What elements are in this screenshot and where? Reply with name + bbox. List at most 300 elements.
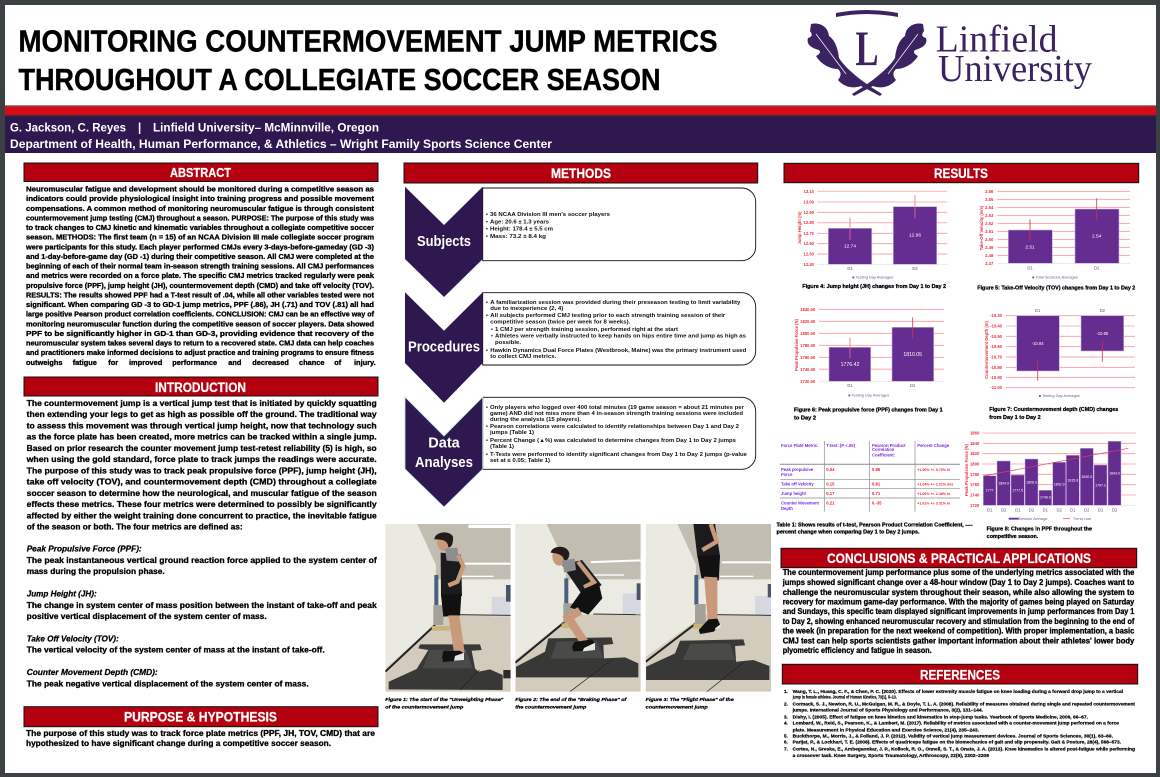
heading: results bbox=[784, 163, 1139, 183]
abstract text: indicators could provide physiological insight into training progress and possible movement bbox=[26, 194, 375, 203]
chart: PPF throughout season: 1760 bbox=[970, 482, 980, 487]
procedures box: All subjects performed CMJ testing prior to each strength training session of their bbox=[490, 313, 725, 319]
reference list: plate. Measurement in Physical Education and Exercise Science, 21(4), 235–243. bbox=[793, 727, 979, 732]
introduction text: to assess this movement was through vertical jump height, now that technology such bbox=[27, 420, 377, 430]
chart: PPF throughout season: 1840 bbox=[970, 441, 980, 446]
heading: conclusions: CONCLUSIONS & PRACTICAL APPLICATIONS bbox=[827, 551, 1091, 566]
abstract text: injury. bbox=[354, 358, 376, 367]
introduction text: as the force plate has been created, more metrics can be tracked within a single jump. bbox=[27, 432, 377, 442]
chart: take-off velocity: 2.55 bbox=[985, 197, 994, 202]
chart: countermovement depth: D2 bbox=[1100, 308, 1106, 313]
data analyses box: Percent Change (▲%) was calculated to determine changes from Day 1 to Day 2 jumps bbox=[490, 438, 736, 444]
panel: results bbox=[776, 163, 1139, 540]
chart: take-off velocity: 2.51 bbox=[1025, 244, 1035, 250]
table 1: force plate metrics: Depth bbox=[781, 506, 793, 511]
subjects chevron: Subjects bbox=[417, 234, 471, 250]
abstract text: beginning of each of their normal team in-season strength training sessions. All CMJ performances bbox=[26, 262, 374, 270]
conclusions text: the week (in preparation for the next weekend of competition). With proper implementation, a basic bbox=[783, 626, 1135, 636]
panel: introduction bbox=[24, 377, 378, 688]
data analyses box: • bbox=[486, 438, 488, 444]
chart: countermovement depth: -10.60 bbox=[990, 344, 1003, 349]
abstract text: outweighs bbox=[26, 358, 63, 367]
authors and affiliation: G. Jackson, C. Reyes bbox=[10, 122, 126, 134]
chart: take-off velocity: 2.50 bbox=[985, 237, 994, 242]
table 1: force plate metrics: Peak propulsive bbox=[781, 467, 814, 472]
abstract text: of bbox=[334, 358, 342, 367]
chart: take-off velocity: 2.48 bbox=[985, 253, 994, 258]
chart: PPF throughout season: 1830.5 bbox=[1081, 475, 1092, 479]
chart: PPF throughout season: Trend Line bbox=[1073, 516, 1091, 521]
introduction text: The purpose of this study was to track peak propulsive force (PPF), jump height (JH), bbox=[27, 465, 377, 475]
chart: countermovement depth: -10.84 bbox=[1032, 341, 1044, 346]
data analyses box: during the analysis (15 players). bbox=[490, 417, 582, 423]
chart: PPF throughout season: 1797.2 bbox=[1095, 484, 1106, 488]
panel: conclusions and practical applications bbox=[781, 548, 1137, 655]
reference list: 2. bbox=[784, 701, 788, 706]
photo captions: Figure 1: The start of the "Unweighting Phase" bbox=[385, 697, 504, 703]
chart: PPF throughout season: 1748.9 bbox=[1040, 496, 1051, 500]
chart: peak propulsive force bbox=[794, 307, 944, 397]
chart: jump height: 13.10 bbox=[804, 189, 815, 194]
procedures box: • bbox=[486, 300, 488, 306]
chart: PPF throughout season bbox=[964, 430, 1136, 521]
data analyses box: • bbox=[486, 452, 488, 458]
heading: references: REFERENCES bbox=[920, 667, 1000, 682]
chart: jump height: 12.40 bbox=[804, 262, 815, 267]
photo captions: Figure 3: The "Flight Phase" of the bbox=[646, 697, 734, 703]
table 1: force plate metrics: 0.71 bbox=[872, 491, 881, 496]
procedures chevron: Procedures bbox=[408, 340, 480, 356]
abstract text: RESULTS: The results showed PPF had a T-test result of .04, while all other variables tested were not bbox=[26, 290, 375, 299]
table 1: force plate metrics: 0.-35 bbox=[872, 500, 882, 506]
procedures box: • bbox=[491, 334, 493, 340]
reference list: jumps. International Journal of Sports Physiology and Performance, 3(2), 131–144. bbox=[792, 707, 983, 712]
chart: PPF throughout season: D2 bbox=[1112, 508, 1118, 512]
caption: figure 7: Figure 7: Countermovement depth (CMD) changes bbox=[989, 407, 1118, 413]
chart: countermovement depth: -10.50 bbox=[990, 334, 1003, 339]
heading: purpose and hypothesis: PURPOSE & HYPOTHESIS bbox=[124, 710, 277, 725]
reference list: 1. bbox=[784, 689, 788, 694]
logo: Linfield University: L bbox=[856, 20, 878, 76]
chart: countermovement depth: -10.90 bbox=[990, 375, 1003, 380]
heading: results: RESULTS bbox=[934, 166, 988, 181]
chart: countermovement depth: -10.65 bbox=[1096, 331, 1109, 336]
chart: PPF throughout season: Session Average bbox=[1018, 516, 1048, 521]
table 1: force plate metrics: Force bbox=[781, 472, 793, 477]
abstract text bbox=[25, 184, 376, 367]
abstract text: improved bbox=[129, 358, 163, 367]
subjects box: Height: 178.4 ± 5.5 cm bbox=[490, 226, 553, 232]
chart: jump height: ■ Testing Day Averages bbox=[852, 275, 893, 280]
heading: conclusions bbox=[781, 548, 1137, 568]
heading: abstract bbox=[24, 163, 378, 182]
reference list: Cortes, N., Greska, E., Ambegaonkar, J. P., Kollock, R. O., Onnell, S. T., & Onate, J. A. (2013). Knee kinematics is altered post-fatigue while performing bbox=[793, 747, 1135, 752]
chart: countermovement depth: D1 bbox=[1035, 308, 1041, 313]
header band bbox=[5, 10, 1156, 153]
chart: PPF throughout season: 1820 bbox=[970, 451, 980, 456]
procedures box: • bbox=[491, 327, 493, 333]
abstract text: neuromuscular system takes several days to return to a recovered state. CMJ data can help coaches bbox=[26, 339, 374, 348]
caption: figure 8 bbox=[987, 526, 1092, 540]
abstract text: and metrics were recorded on a force plate. The specific CMJ metrics tracked regularly were peak bbox=[26, 271, 375, 280]
title: THROUGHOUT A COLLEGIATE SOCCER SEASON bbox=[18, 62, 660, 97]
table 1: force plate metrics: Pearson Product bbox=[872, 443, 906, 448]
chart: PPF throughout season: 1780 bbox=[970, 472, 980, 477]
chart: peak propulsive force: 1840.00 bbox=[800, 307, 816, 312]
chart: jump height: 12.60 bbox=[804, 241, 815, 246]
reference list bbox=[784, 689, 1135, 758]
heading: introduction bbox=[24, 377, 378, 396]
table 1: force plate metrics: 0.15 bbox=[826, 482, 835, 486]
photo captions: the countermovement jump bbox=[515, 704, 586, 710]
chart: countermovement depth: -11.00 bbox=[990, 385, 1003, 390]
abstract text: to track changes to CMJ kinetic and kinematic variables throughout a collegiate competitive soccer bbox=[26, 223, 374, 232]
heading: references bbox=[782, 664, 1138, 684]
abstract text: season. METHODS: The first team (n = 15) of an NCAA Division III male collegiate soccer program bbox=[26, 233, 374, 242]
procedures box: • bbox=[486, 313, 488, 319]
authors and affiliation: Department of Health, Human Performance, & Athletics – Wright Family Sports Science Center bbox=[10, 139, 553, 151]
caption: figure 6: to Day 2 bbox=[794, 415, 816, 421]
procedures box bbox=[483, 293, 756, 365]
panel: references bbox=[782, 664, 1138, 758]
chart: take-off velocity: ■ Total Sessions Averages bbox=[1032, 275, 1078, 280]
table 1: force plate metrics: 0.21 bbox=[826, 500, 835, 506]
photo: figure 2 braking phase bbox=[515, 524, 641, 692]
abstract text: and bbox=[228, 358, 242, 367]
caption: table 1: Table 1: Shows results of t-test, Pearson Product Correlation Coefficient, ---- bbox=[776, 522, 973, 528]
abstract text: significant. When comparing GD -3 to GD-1 jump metrics, PPF (.86), JH (.71) and TOV (.81) all had bbox=[26, 300, 374, 309]
chart: take-off velocity: D1 bbox=[1027, 266, 1033, 270]
table 1: force plate metrics bbox=[780, 441, 960, 512]
chart: jump height: Jump Height (m) bbox=[797, 211, 802, 245]
chart: PPF throughout season: 1800 bbox=[970, 462, 980, 466]
photo captions: of the countermovement jump bbox=[385, 704, 463, 710]
abstract text: were participants for this study. Each player performed CMJs every 3-days-before-gameday (GD -3) bbox=[25, 242, 375, 251]
conclusions text: and Sundays, this specific team displayed significant improvements in jump performances from Day 1 bbox=[783, 607, 1135, 616]
procedures box: • bbox=[486, 348, 488, 354]
abstract text: and 1-day-before-game day (GD -1) during their competitive season. All CMJ were completed at the bbox=[26, 252, 374, 261]
chart: take-off velocity: 2.53 bbox=[985, 213, 994, 218]
chart: PPF throughout season: D2 bbox=[1084, 508, 1090, 512]
chart: peak propulsive force: 1760.00 bbox=[800, 355, 816, 360]
chart: countermovement depth: -10.70 bbox=[990, 354, 1003, 360]
abstract text: for bbox=[108, 358, 118, 367]
metric definitions: The change in system center of mass position between the instant of take-off and peak bbox=[27, 600, 377, 610]
title bbox=[18, 24, 718, 97]
reference list: 5. bbox=[784, 733, 788, 738]
abstract text: chance bbox=[299, 358, 324, 367]
data analyses box: jumps (Table 1) bbox=[489, 430, 534, 436]
chart: PPF throughout season: D2 bbox=[1029, 508, 1035, 512]
metric definitions: The peak instantaneous vertical ground reaction force applied to the system center of bbox=[27, 555, 377, 565]
subjects box: Mass: 73.2 ± 8.4 kg bbox=[490, 234, 546, 240]
panel: methods bbox=[404, 163, 758, 507]
conclusions text: CMJ test can help sports scientists gather important information about their athletes' lower body bbox=[783, 636, 1135, 646]
procedures chevron bbox=[405, 292, 483, 403]
chart: PPF throughout season: 1804.9 bbox=[998, 481, 1009, 485]
subjects box: • bbox=[486, 220, 488, 226]
chart: peak propulsive force: D2 bbox=[910, 383, 916, 388]
chart: take-off velocity: 2.52 bbox=[985, 221, 994, 226]
procedures box: A familiarization session was provided during their preseason testing to limit variability bbox=[490, 300, 740, 306]
chart: jump height bbox=[797, 189, 947, 280]
abstract text: and practitioners make informed decisions to adjust practice and training programs to ensure fitness bbox=[26, 348, 374, 357]
metric definitions: Peak Propulsive Force (PPF): bbox=[27, 544, 142, 554]
procedures box: competitive season (twice per week for 8 weeks). bbox=[490, 320, 631, 326]
conclusions text: challenge the neuromuscular system throughout their season, while also allowing the system to bbox=[783, 588, 1135, 597]
chart: countermovement depth bbox=[984, 308, 1135, 398]
caption: figure 6 bbox=[794, 407, 943, 421]
data analyses box: • bbox=[486, 424, 488, 430]
table 1: force plate metrics: Coefficient: bbox=[872, 452, 895, 458]
logo: Linfield University: University bbox=[938, 48, 1092, 90]
chart: take-off velocity: Take-Off Velocity (m/s) bbox=[979, 205, 984, 250]
procedures box: to collect CMJ metrics. bbox=[490, 354, 557, 360]
subjects chevron bbox=[405, 187, 483, 297]
chart: jump height: 12.80 bbox=[804, 220, 815, 225]
procedures box: due to inexperience (2, 4) bbox=[490, 306, 564, 312]
chart: PPF throughout season: 1808.3 bbox=[1026, 480, 1037, 484]
introduction text: soccer season to determine how the neurological, and muscular fatigue of the season bbox=[27, 488, 377, 498]
chart: peak propulsive force: 1780.00 bbox=[800, 343, 816, 348]
data analyses chevron: Analyses bbox=[415, 455, 473, 471]
reference list: Buckthorpe, M., Morris, J., & Folland, J. P. (2012). Validity of vertical jump measurement devices. Journal of Sports Sciences, 30(1), 63–69. bbox=[793, 733, 1113, 738]
data analyses box: game) AND did not miss more than 4 in-season strength training sessions were included bbox=[490, 411, 743, 417]
conclusions text: to Day 2, showing enhanced neuromuscular recovery and stimulation from the beginning to the end of bbox=[783, 617, 1135, 626]
table 1: force plate metrics: 0.81 bbox=[872, 482, 881, 486]
table 1: force plate metrics: 0.86 bbox=[872, 467, 881, 472]
chart: PPF throughout season: D1 bbox=[1043, 508, 1049, 512]
logo: Linfield University: Linfield bbox=[936, 19, 1058, 61]
reference list: jump in female athletes. Journal of Human Kinetics, 73(1), 5–13. bbox=[792, 695, 897, 700]
chart: countermovement depth: Countermovement Depth (m) bbox=[984, 321, 989, 379]
caption: table 1: percent change when comparing Day 1 to Day 2 jumps. bbox=[776, 530, 920, 536]
chart: take-off velocity: 2.54 bbox=[985, 205, 994, 210]
authors and affiliation bbox=[10, 122, 553, 151]
abstract text: large positive Pearson product correlation coefficients. CONCLUSION: CMJ can be an effective way of bbox=[26, 310, 375, 319]
heading: methods: METHODS bbox=[551, 166, 611, 181]
metric definitions: mass during the propulsion phase. bbox=[27, 566, 165, 576]
reference list: Parijat, P., & Lockhart, T. E. (2008). Effects of quadriceps fatigue on the biomechanics of gait and slip propensity. Gait & Posture, 28(4), 568–573. bbox=[793, 739, 1121, 744]
authors and affiliation: Linfield University– McMinnville, Oregon bbox=[153, 122, 379, 134]
metric definitions: The vertical velocity of the system center of mass at the instant of take-off. bbox=[27, 644, 325, 654]
chart: countermovement depth: -10.80 bbox=[990, 365, 1003, 370]
chart: peak propulsive force: 1810.05 bbox=[903, 352, 922, 358]
photo captions: Figure 2: The end of the "Braking Phase" of bbox=[515, 697, 628, 703]
subjects box: 36 NCAA Division III men's soccer players bbox=[490, 212, 610, 218]
chart: PPF throughout season: 1843.0 bbox=[1109, 472, 1120, 476]
data analyses box: (Table 1) bbox=[490, 444, 514, 450]
caption: figure 5: Figure 5: Take-Off Velocity (TOV) changes from Day 1 to Day 2 bbox=[977, 285, 1135, 291]
conclusions text: plyometric efficiency and fatigue in season. bbox=[783, 646, 932, 655]
metric definitions: Take Off Velocity (TOV): bbox=[27, 634, 119, 644]
conclusions text bbox=[782, 568, 1135, 655]
chart: PPF throughout season: 1720 bbox=[970, 503, 980, 508]
procedures box: 1 CMJ per strength training session, performed right at the start bbox=[495, 327, 678, 333]
panel: purpose and hypothesis bbox=[24, 707, 378, 748]
caption: figure 8: competitive season. bbox=[987, 534, 1039, 540]
caption: figure 7 bbox=[989, 407, 1118, 421]
data analyses box: • bbox=[486, 405, 488, 411]
chart: PPF throughout season: 1860 bbox=[970, 430, 980, 436]
abstract text: monitoring neuromuscular function during the competitive season of soccer players. Data showed bbox=[26, 319, 374, 328]
reference list: Lombard, W., Reid, S., Pearson, K., & Lambert, M. (2017). Reliability of metrics associated with a counter-movement jump performed on a force bbox=[793, 720, 1119, 725]
subjects box: • bbox=[486, 226, 488, 232]
subjects box: Age: 20.6 ± 1.3 years bbox=[490, 220, 549, 226]
chart: jump height: 13.00 bbox=[804, 200, 815, 204]
reference list: 3. bbox=[784, 714, 788, 719]
introduction text: take off velocity (TOV), and countermovement depth (CMD) throughout a collegiate bbox=[27, 477, 377, 487]
data analyses chevron bbox=[405, 397, 483, 507]
introduction text: Based on prior research the counter movement jump test-retest reliability (5) is high, so bbox=[27, 443, 377, 453]
photo captions: countermovement jump bbox=[646, 704, 708, 710]
metric definitions: The peak negative vertical displacement of the system center of mass. bbox=[27, 678, 309, 688]
table 1: force plate metrics: Counter Movement bbox=[781, 500, 820, 506]
chart: countermovement depth: -10.30 bbox=[990, 313, 1003, 318]
chart: peak propulsive force: 1820.00 bbox=[800, 319, 816, 324]
data analyses box: Only players who logged over 400 total minutes (19 game season = about 21 minutes per bbox=[490, 405, 744, 411]
chart: jump height: 12.50 bbox=[804, 252, 815, 256]
chart: PPF throughout season: 1740 bbox=[970, 492, 980, 498]
chart: PPF throughout season: 1802.9 bbox=[1054, 482, 1065, 486]
conclusions text: recovery for maximum game-day performance. With the majority of games being played on Saturday bbox=[783, 598, 1135, 606]
metric definitions: positive vertical displacement of the system center of mass. bbox=[27, 611, 267, 621]
chart: peak propulsive force: 1740.00 bbox=[800, 367, 816, 372]
chart: take-off velocity: 2.56 bbox=[985, 189, 994, 194]
authors and affiliation: | bbox=[138, 122, 141, 134]
metric definitions: Jump Height (JH): bbox=[27, 588, 97, 598]
chart: PPF throughout season: D1 bbox=[1015, 508, 1021, 512]
data analyses box: set at ≤ 0.05; Table 1) bbox=[490, 458, 550, 464]
caption: figure 8: Figure 8: Changes in PPF throughout the bbox=[987, 526, 1092, 532]
data analyses chevron: Data bbox=[428, 436, 461, 452]
chart: PPF throughout season: 1815.8 bbox=[1067, 478, 1078, 482]
heading: abstract: ABSTRACT bbox=[170, 165, 231, 180]
procedures box: possible. bbox=[495, 340, 522, 346]
reference list: 7. bbox=[784, 747, 788, 752]
abstract text: decreased bbox=[252, 358, 289, 367]
table 1: force plate metrics: T-test: (P <.05) bbox=[826, 443, 856, 448]
heading: introduction: INTRODUCTION bbox=[155, 380, 246, 395]
chart: PPF throughout season: D1 bbox=[1098, 508, 1104, 512]
introduction text: then extending your legs to get as high as possible off the ground. The traditional way bbox=[27, 409, 377, 419]
abstract text: Neuromuscular fatigue and development should be monitored during a competitive season as bbox=[26, 184, 374, 194]
panel: abstract bbox=[24, 163, 378, 367]
abstract text: countermovement jump testing (CMJ) throughout a season. PURPOSE: The purpose of this study was bbox=[26, 213, 374, 222]
purpose text: hypothesized to have significant change during a competitive soccer season. bbox=[26, 739, 331, 748]
caption: figure 6: Figure 6: Peak propulsive force (PPF) changes from Day 1 bbox=[794, 407, 943, 413]
data analyses box: Pearson correlations were calculated to identify relationships between Day 1 and Day 2 bbox=[490, 424, 739, 430]
caption: figure 4: Figure 4: Jump height (JH) changes from Day 1 to Day 2 bbox=[802, 284, 946, 290]
heading: purpose and hypothesis bbox=[24, 707, 378, 727]
table 1: force plate metrics: Percent Change bbox=[917, 443, 950, 448]
chart: PPF throughout season: 1777.5 bbox=[1012, 489, 1023, 493]
reference list: 6. bbox=[784, 739, 788, 744]
purpose text: The purpose of this study was to track force plate metrics (PPF, JH, TOV, CMD) that are bbox=[26, 729, 376, 738]
reference list: 4. bbox=[784, 720, 788, 725]
table 1: force plate metrics: Jump height bbox=[781, 491, 806, 496]
chart: peak propulsive force: ■ Testing Day Averages bbox=[848, 392, 889, 397]
introduction text bbox=[26, 398, 377, 532]
chart: PPF throughout season: D1 bbox=[987, 508, 993, 512]
conclusions text: The countermovement jump performance plus some of the underlying metrics associated with the bbox=[783, 568, 1135, 577]
table 1: force plate metrics: 0.04 bbox=[826, 467, 835, 472]
data analyses box: T-Tests were performed to identify significant changes from Day 1 to Day 2 jumps (p-value bbox=[490, 452, 747, 458]
subjects box: • bbox=[486, 212, 488, 218]
logo: Linfield University bbox=[808, 10, 1092, 96]
photo: figure 3 flight phase bbox=[646, 524, 772, 692]
table 1: force plate metrics: Take off Velocity bbox=[781, 482, 814, 486]
title: MONITORING COUNTERMOVEMENT JUMP METRICS bbox=[18, 24, 718, 59]
introduction text: affected by either the weight training done concurrent to practice, the inevitable fatigue bbox=[27, 510, 377, 520]
abstract text: propulsive force (PPF), jump height (JH), countermovement depth (CMD) and take off velocity (TOV). bbox=[26, 281, 374, 290]
introduction text: of the season or both. The four metrics are defined as: bbox=[27, 522, 243, 532]
chart: take-off velocity: 2.47 bbox=[985, 261, 994, 266]
heading: methods bbox=[404, 163, 758, 183]
chart: take-off velocity: 2.49 bbox=[985, 245, 994, 250]
photo captions bbox=[385, 697, 734, 710]
table 1: force plate metrics: +1.06% +/- 2.38% in bbox=[917, 492, 950, 496]
chart: countermovement depth: ■ Testing Day Averages bbox=[1039, 393, 1080, 398]
introduction text: The countermovement jump is a vertical jump test that is initiated by quickly squatting bbox=[27, 398, 377, 408]
table 1: force plate metrics: Correlation bbox=[872, 447, 895, 452]
table 1: force plate metrics: +1.61% +/- 3.31% in bbox=[917, 502, 950, 506]
metric definitions: Counter Movement Depth (CMD): bbox=[27, 667, 158, 677]
chart: peak propulsive force: D1 bbox=[847, 383, 853, 388]
chart: jump height: D1 bbox=[847, 266, 853, 271]
chart: jump height: 12.90 bbox=[804, 210, 815, 215]
abstract text: PPF to be significantly higher in GD-1 than GD-3, providing evidence that recovery of the bbox=[26, 329, 374, 338]
chart: peak propulsive force: 1800.00 bbox=[800, 331, 816, 336]
abstract text: compensations. A common method of monitoring neuromuscular fatigue is through consistent bbox=[26, 204, 375, 213]
chart: take-off velocity bbox=[979, 189, 1130, 280]
reference list: Wang, T. L., Huang, C. F., & Chen, P. C. (2020). Effects of lower extremity muscle fatigue on knee loading during a forward drop jump to a vertical bbox=[793, 689, 1123, 694]
chart: PPF throughout season: D2 bbox=[1001, 508, 1007, 512]
conclusions text: jumps showed significant change over a 48-hour window (Day 1 to Day 2 jumps). Coaches want to bbox=[782, 578, 1135, 587]
chart: PPF throughout season: D1 bbox=[1070, 508, 1076, 512]
chart: jump height: D2 bbox=[912, 266, 918, 271]
table 1: force plate metrics: +1.90% +/- 0.70% N bbox=[917, 468, 950, 472]
chart: jump height: 12.70 bbox=[804, 231, 815, 236]
chart: take-off velocity: 2.54 bbox=[1092, 234, 1102, 240]
abstract text: performance bbox=[172, 358, 217, 367]
abstract text: fatigue bbox=[73, 358, 97, 367]
chart: peak propulsive force: 1776.42 bbox=[841, 362, 859, 368]
subjects box bbox=[483, 188, 756, 261]
chart: countermovement depth: -10.40 bbox=[990, 324, 1003, 328]
chart: jump height: 12.74 bbox=[844, 244, 856, 250]
chart: jump height: 12.96 bbox=[909, 233, 921, 239]
introduction text: when using the gold standard, force plate to track jumps the readings were accurate. bbox=[26, 454, 377, 464]
chart: PPF throughout season: 1777 bbox=[986, 489, 994, 493]
chart: peak propulsive force: Peak Propulsive Force (N) bbox=[794, 318, 799, 371]
chart: take-off velocity: D2 bbox=[1094, 266, 1100, 270]
chart: PPF throughout season: D2 bbox=[1057, 508, 1063, 512]
procedures box: Hawkin Dynamics Dual Force Plates (Westbrook, Maine) was the primary instrument used bbox=[490, 348, 746, 354]
introduction text: effects these metrics. These four metrics were determined to possibly be significantly bbox=[27, 499, 377, 509]
caption: table 1 bbox=[776, 522, 973, 536]
purpose text bbox=[26, 729, 376, 748]
chart: PPF throughout season: Peak Propulsive Force (N) bbox=[964, 443, 969, 496]
data analyses box bbox=[483, 397, 756, 469]
table 1: force plate metrics: 0.17 bbox=[826, 491, 835, 496]
table 1: force plate metrics: +1.04% +/- 1.21% m/s bbox=[917, 482, 953, 486]
chart: peak propulsive force: 1720.00 bbox=[800, 379, 816, 384]
procedures box: Athletes were verbally instructed to keep hands on hips entire time and jump as high as bbox=[495, 334, 746, 340]
metric definitions bbox=[27, 544, 377, 688]
chart: take-off velocity: 2.51 bbox=[985, 229, 994, 234]
subjects box: • bbox=[486, 234, 488, 240]
